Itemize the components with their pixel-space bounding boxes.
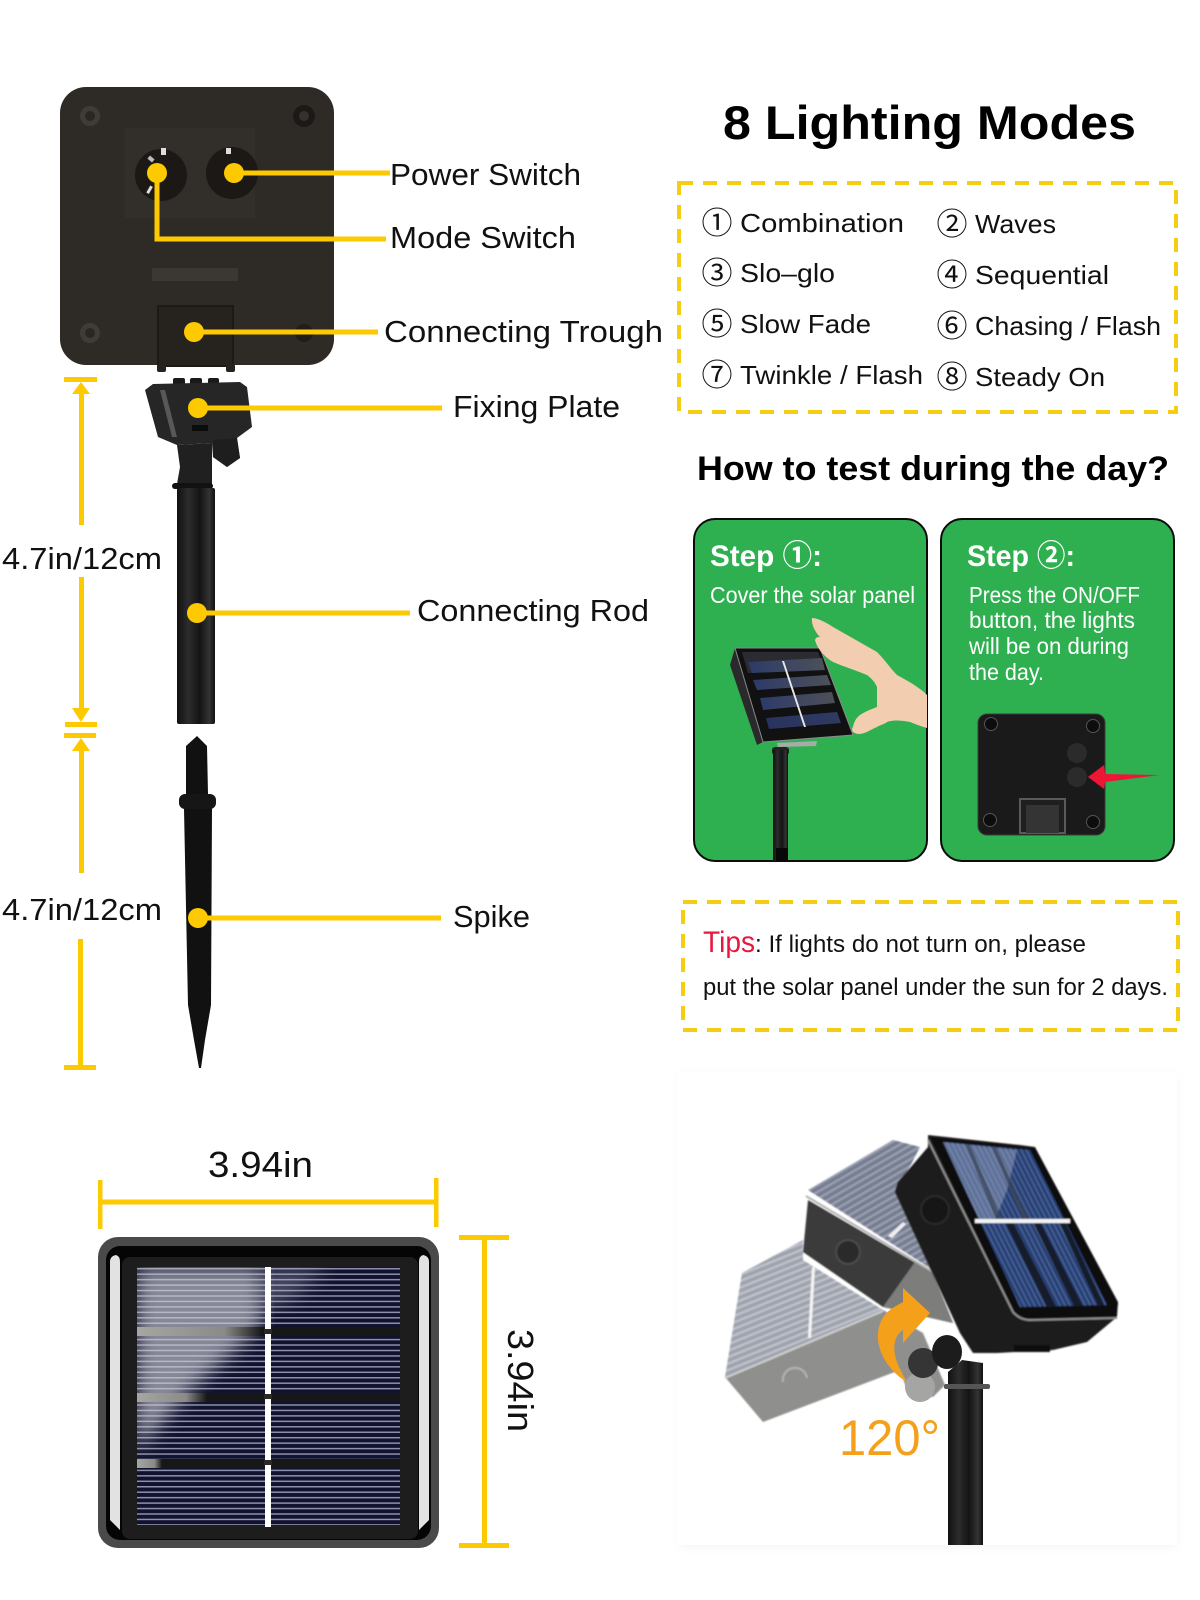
mode 2: ② (936, 199, 968, 244)
dimension: upper rod height: 4.7in/12cm (2, 541, 162, 576)
dimension: spike height: 4.7in/12cm (2, 892, 162, 927)
product: battery box back (60, 87, 334, 372)
mode 3: Slo–glo (740, 258, 835, 288)
callout: power switch: Power Switch (390, 157, 581, 192)
callout: mode switch: Mode Switch (390, 220, 576, 255)
tips text: Tips (703, 926, 755, 959)
product: solar panel top view (98, 1237, 439, 1548)
arrow: red pointer to power button (1088, 765, 1160, 789)
callout: power switch (224, 157, 581, 192)
panel: step 1 card (694, 519, 927, 861)
dimension: spike height (2, 733, 162, 1070)
callout: spike (188, 899, 530, 934)
step 1 text: Cover the solar panel (710, 582, 915, 608)
step 2 text (968, 582, 1140, 685)
product: connecting rod (172, 443, 215, 724)
mode 1: Combination (740, 208, 904, 238)
dimension: height (459, 1235, 541, 1548)
mode 4 (936, 250, 1109, 295)
mode 3: ③ (702, 248, 732, 293)
step 2 text: button, the lights (969, 607, 1135, 633)
title: 8 Lighting Modes: 8 Lighting Modes (723, 96, 1136, 149)
tips text (703, 926, 1168, 1001)
panel: lighting mode list (679, 183, 1176, 412)
mode 2 (936, 199, 1056, 244)
mode 5 (702, 299, 871, 344)
panel: tips box (683, 902, 1178, 1030)
callout: mode switch (147, 163, 576, 255)
dimension: height: 3.94in (500, 1329, 541, 1432)
step 2 text: will be on during (968, 633, 1129, 659)
illustration: hand covering solar panel (730, 618, 927, 861)
label: 120 degrees: 120° (839, 1410, 940, 1466)
mode 3 (702, 248, 835, 293)
illustration: main solar panel position (895, 1135, 1118, 1353)
callout: spike: Spike (453, 899, 530, 934)
dimension: width: 3.94in (208, 1144, 313, 1185)
mode 1: ① (702, 198, 732, 243)
mode 4: Sequential (975, 260, 1109, 290)
mode 8: Steady On (975, 362, 1105, 392)
mode 2: Waves (975, 209, 1056, 239)
callout: fixing plate: Fixing Plate (453, 389, 620, 424)
mode 7 (702, 350, 923, 395)
panel: step 2 card (941, 519, 1174, 861)
step 2 text: Press the ON/OFF (969, 582, 1140, 608)
panel: 120 degree rotation photo (724, 1134, 1120, 1545)
step 1 heading: Step ①: (710, 540, 822, 573)
mode 1 (702, 198, 904, 243)
callout: connecting trough (184, 314, 663, 349)
callout: fixing plate (188, 389, 620, 424)
mode 5: Slow Fade (740, 309, 871, 339)
mode 8 (936, 352, 1105, 397)
illustration: middle ghost position (803, 1140, 953, 1323)
panel: solar panel with dimensions (98, 1144, 541, 1548)
callout: connecting trough: Connecting Trough (384, 314, 663, 349)
product: spike (179, 736, 216, 1068)
illustration: lowest ghost position (725, 1240, 945, 1422)
dimension: upper rod height (2, 377, 162, 727)
mode 6: ⑥ (936, 301, 968, 346)
mode 4: ④ (936, 250, 968, 295)
callout: connecting rod (187, 593, 649, 628)
illustration: battery box back (978, 714, 1105, 835)
tips text: put the solar panel under the sun for 2 days. (703, 974, 1168, 1001)
panel: product diagram with labelled parts (2, 87, 663, 1070)
heading: how to test during the day: How to test during the day? (697, 450, 1169, 488)
product: fixing plate (145, 378, 252, 467)
mode 7: Twinkle / Flash (740, 360, 923, 390)
tips text: : If lights do not turn on, please (755, 931, 1086, 958)
mode 8: ⑧ (936, 352, 968, 397)
dimension: width (98, 1144, 438, 1229)
mode 6: Chasing / Flash (975, 311, 1161, 341)
step 2 text: the day. (969, 659, 1044, 685)
step 2 heading: Step ②: (967, 540, 1075, 573)
mode 6 (936, 301, 1161, 346)
arrow: orange rotation arrow (878, 1288, 930, 1382)
callout: connecting rod: Connecting Rod (417, 593, 649, 628)
mode 5: ⑤ (702, 299, 732, 344)
mode 7: ⑦ (702, 350, 732, 395)
illustration: hinge and pole (905, 1335, 990, 1545)
